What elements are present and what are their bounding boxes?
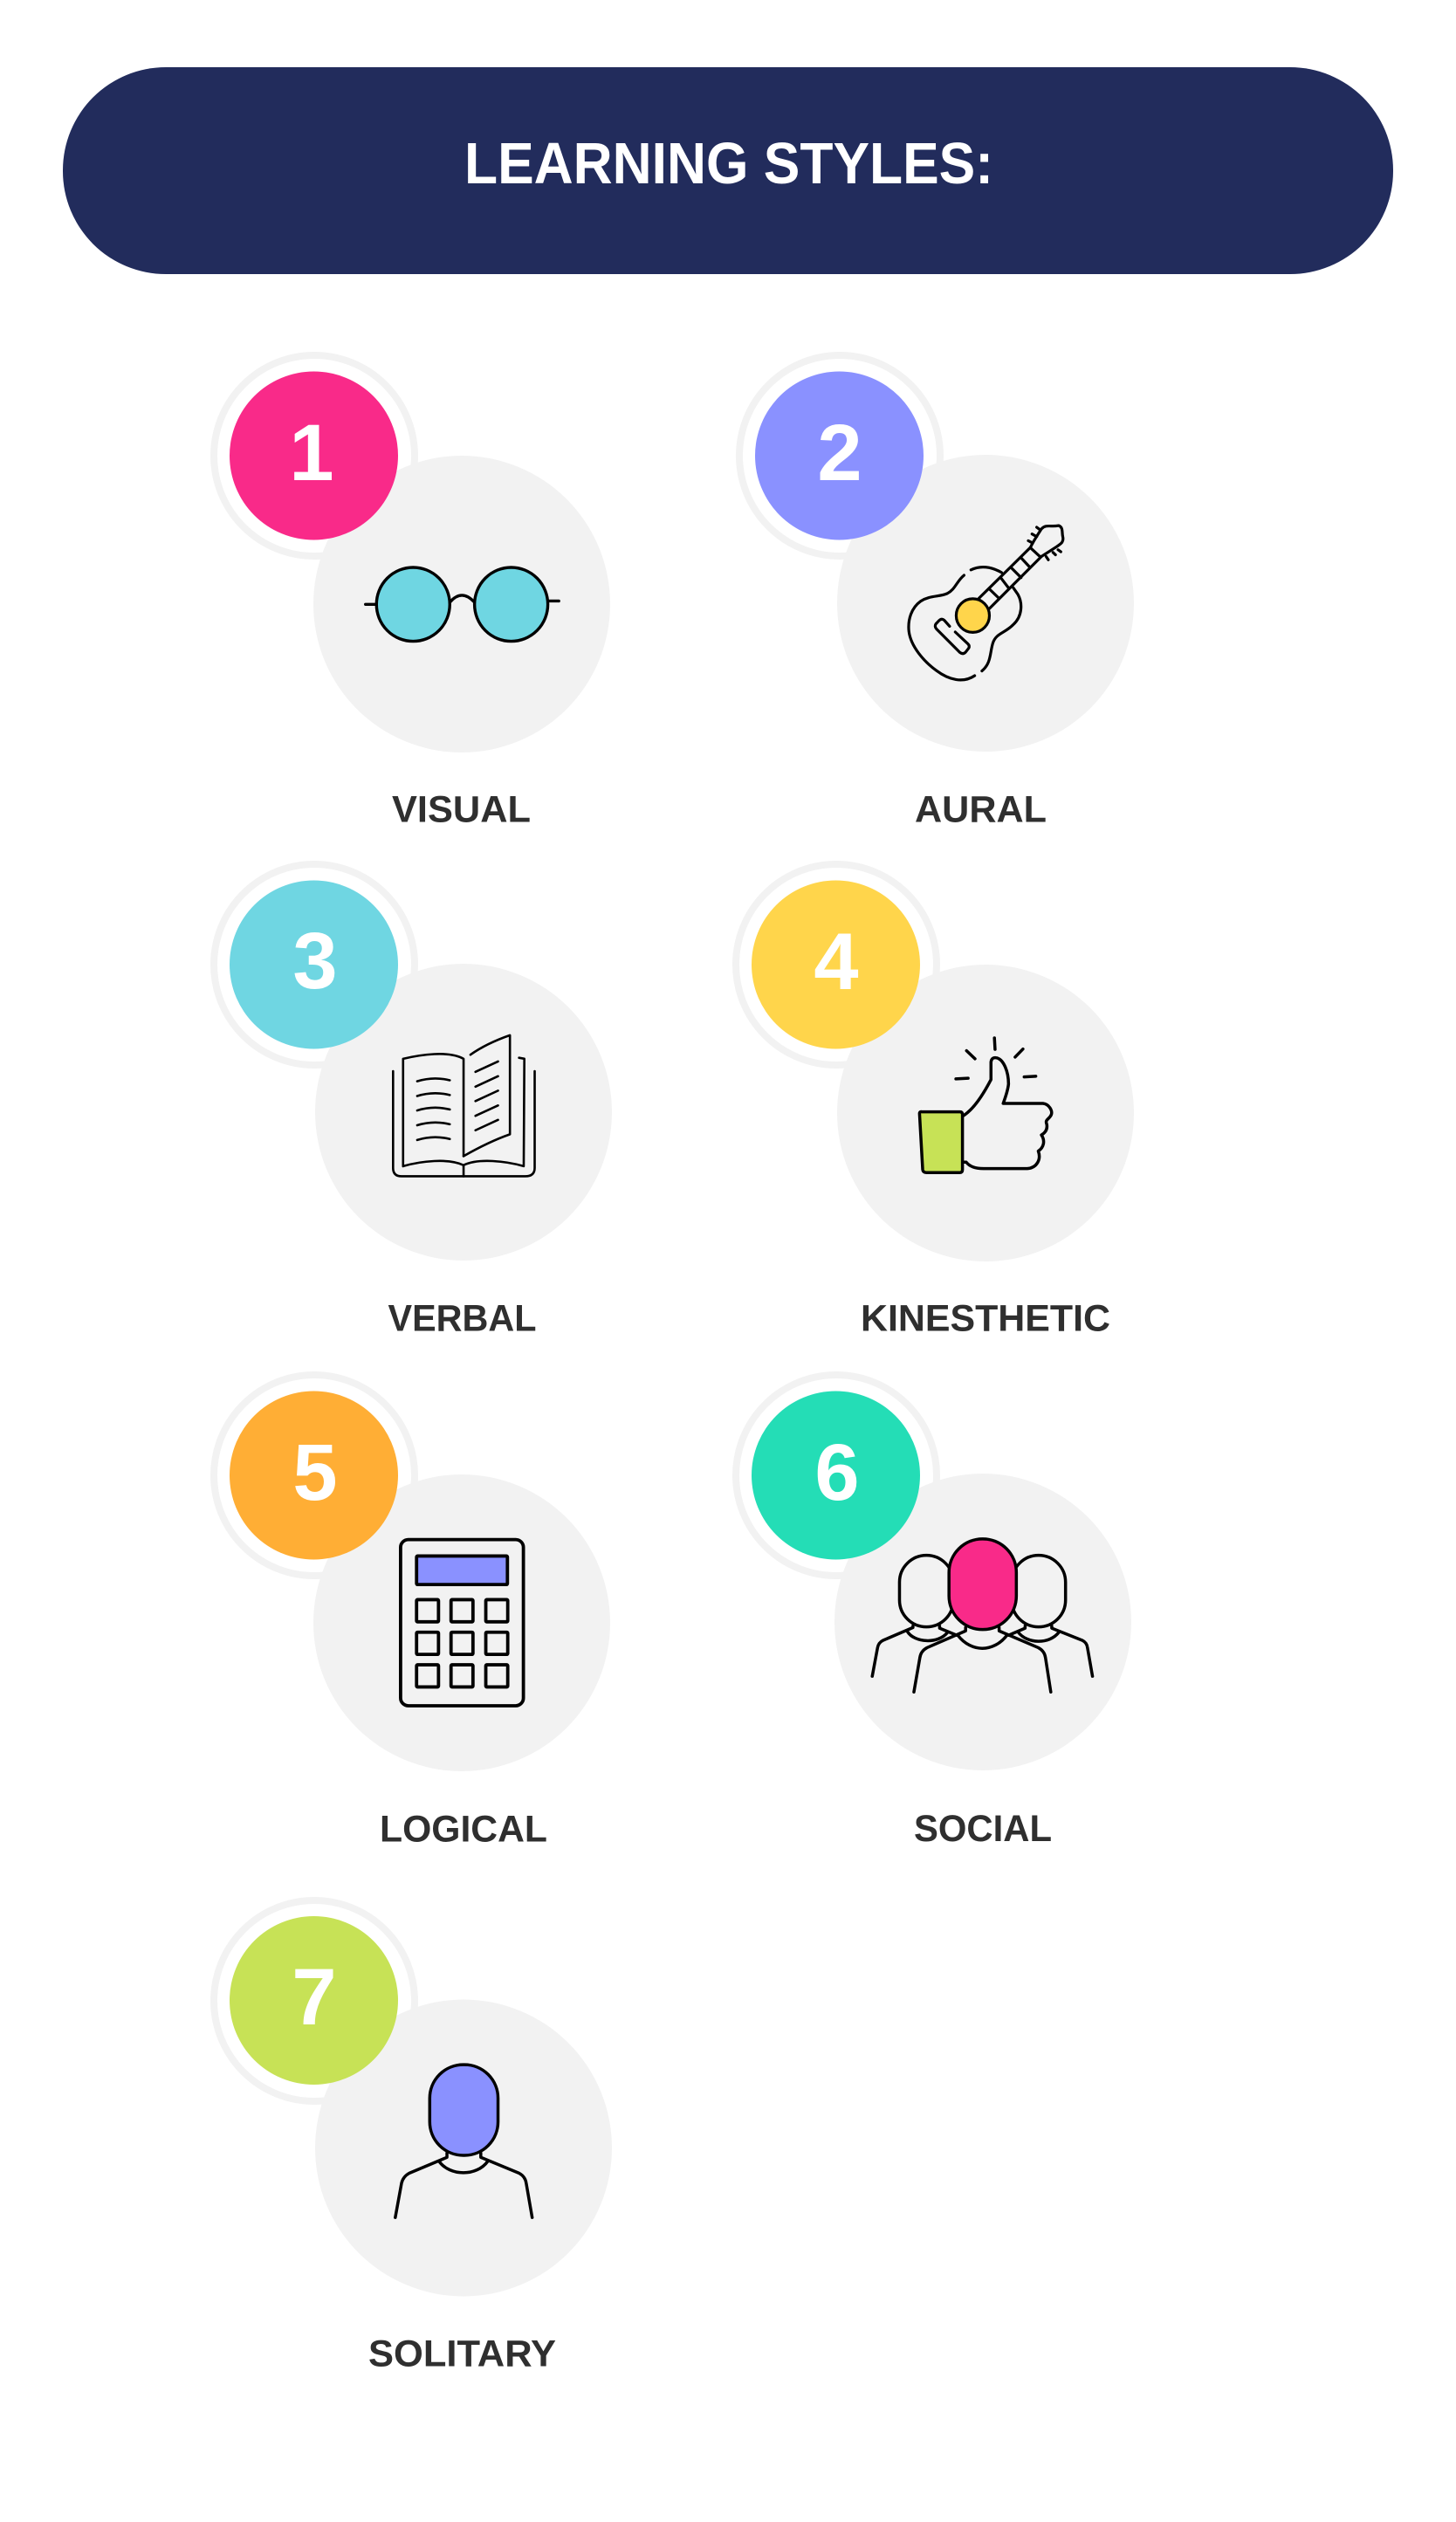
number badge 2: 2 bbox=[817, 409, 862, 498]
panel: kinesthetic bbox=[736, 864, 1134, 1339]
number badge 5: 5 bbox=[292, 1428, 338, 1517]
icon: thumbs up bbox=[919, 1038, 1052, 1172]
panel: logical bbox=[214, 1375, 610, 1851]
panel: verbal bbox=[214, 864, 612, 1339]
panel: social bbox=[736, 1375, 1131, 1850]
title banner bbox=[63, 67, 1393, 274]
panel: visual bbox=[214, 355, 610, 831]
number badge 4 bbox=[752, 880, 920, 1049]
number badge 3 bbox=[230, 880, 398, 1049]
label: logical: LOGICAL bbox=[380, 1809, 547, 1851]
number badge 5 bbox=[230, 1392, 398, 1559]
label: social: SOCIAL bbox=[914, 1808, 1052, 1850]
number badge 7: 7 bbox=[292, 1953, 337, 2042]
panel: aural bbox=[739, 355, 1134, 831]
label: verbal: VERBAL bbox=[388, 1297, 536, 1339]
label: aural: AURAL bbox=[915, 789, 1047, 831]
label: visual: VISUAL bbox=[392, 789, 531, 831]
icon: group of people bbox=[872, 1539, 1093, 1692]
number badge 6 bbox=[752, 1392, 920, 1559]
label: kinesthetic: KINESTHETIC bbox=[861, 1297, 1110, 1339]
number badge 4: 4 bbox=[814, 917, 859, 1007]
panel: solitary bbox=[214, 1900, 612, 2374]
number badge 1: 1 bbox=[289, 409, 334, 498]
icon: open book bbox=[393, 1035, 535, 1176]
number badge 6: 6 bbox=[814, 1428, 860, 1517]
label: solitary: SOLITARY bbox=[368, 2333, 556, 2374]
number badge 1 bbox=[230, 372, 398, 539]
title banner: LEARNING STYLES: bbox=[464, 131, 993, 196]
icon: guitar bbox=[909, 526, 1063, 680]
number badge 3: 3 bbox=[292, 917, 338, 1006]
icon: single person bbox=[395, 2065, 532, 2217]
icon: glasses bbox=[366, 567, 559, 642]
number badge 2 bbox=[755, 372, 924, 539]
number badge 7 bbox=[230, 1916, 398, 2085]
icon: calculator bbox=[401, 1540, 524, 1706]
